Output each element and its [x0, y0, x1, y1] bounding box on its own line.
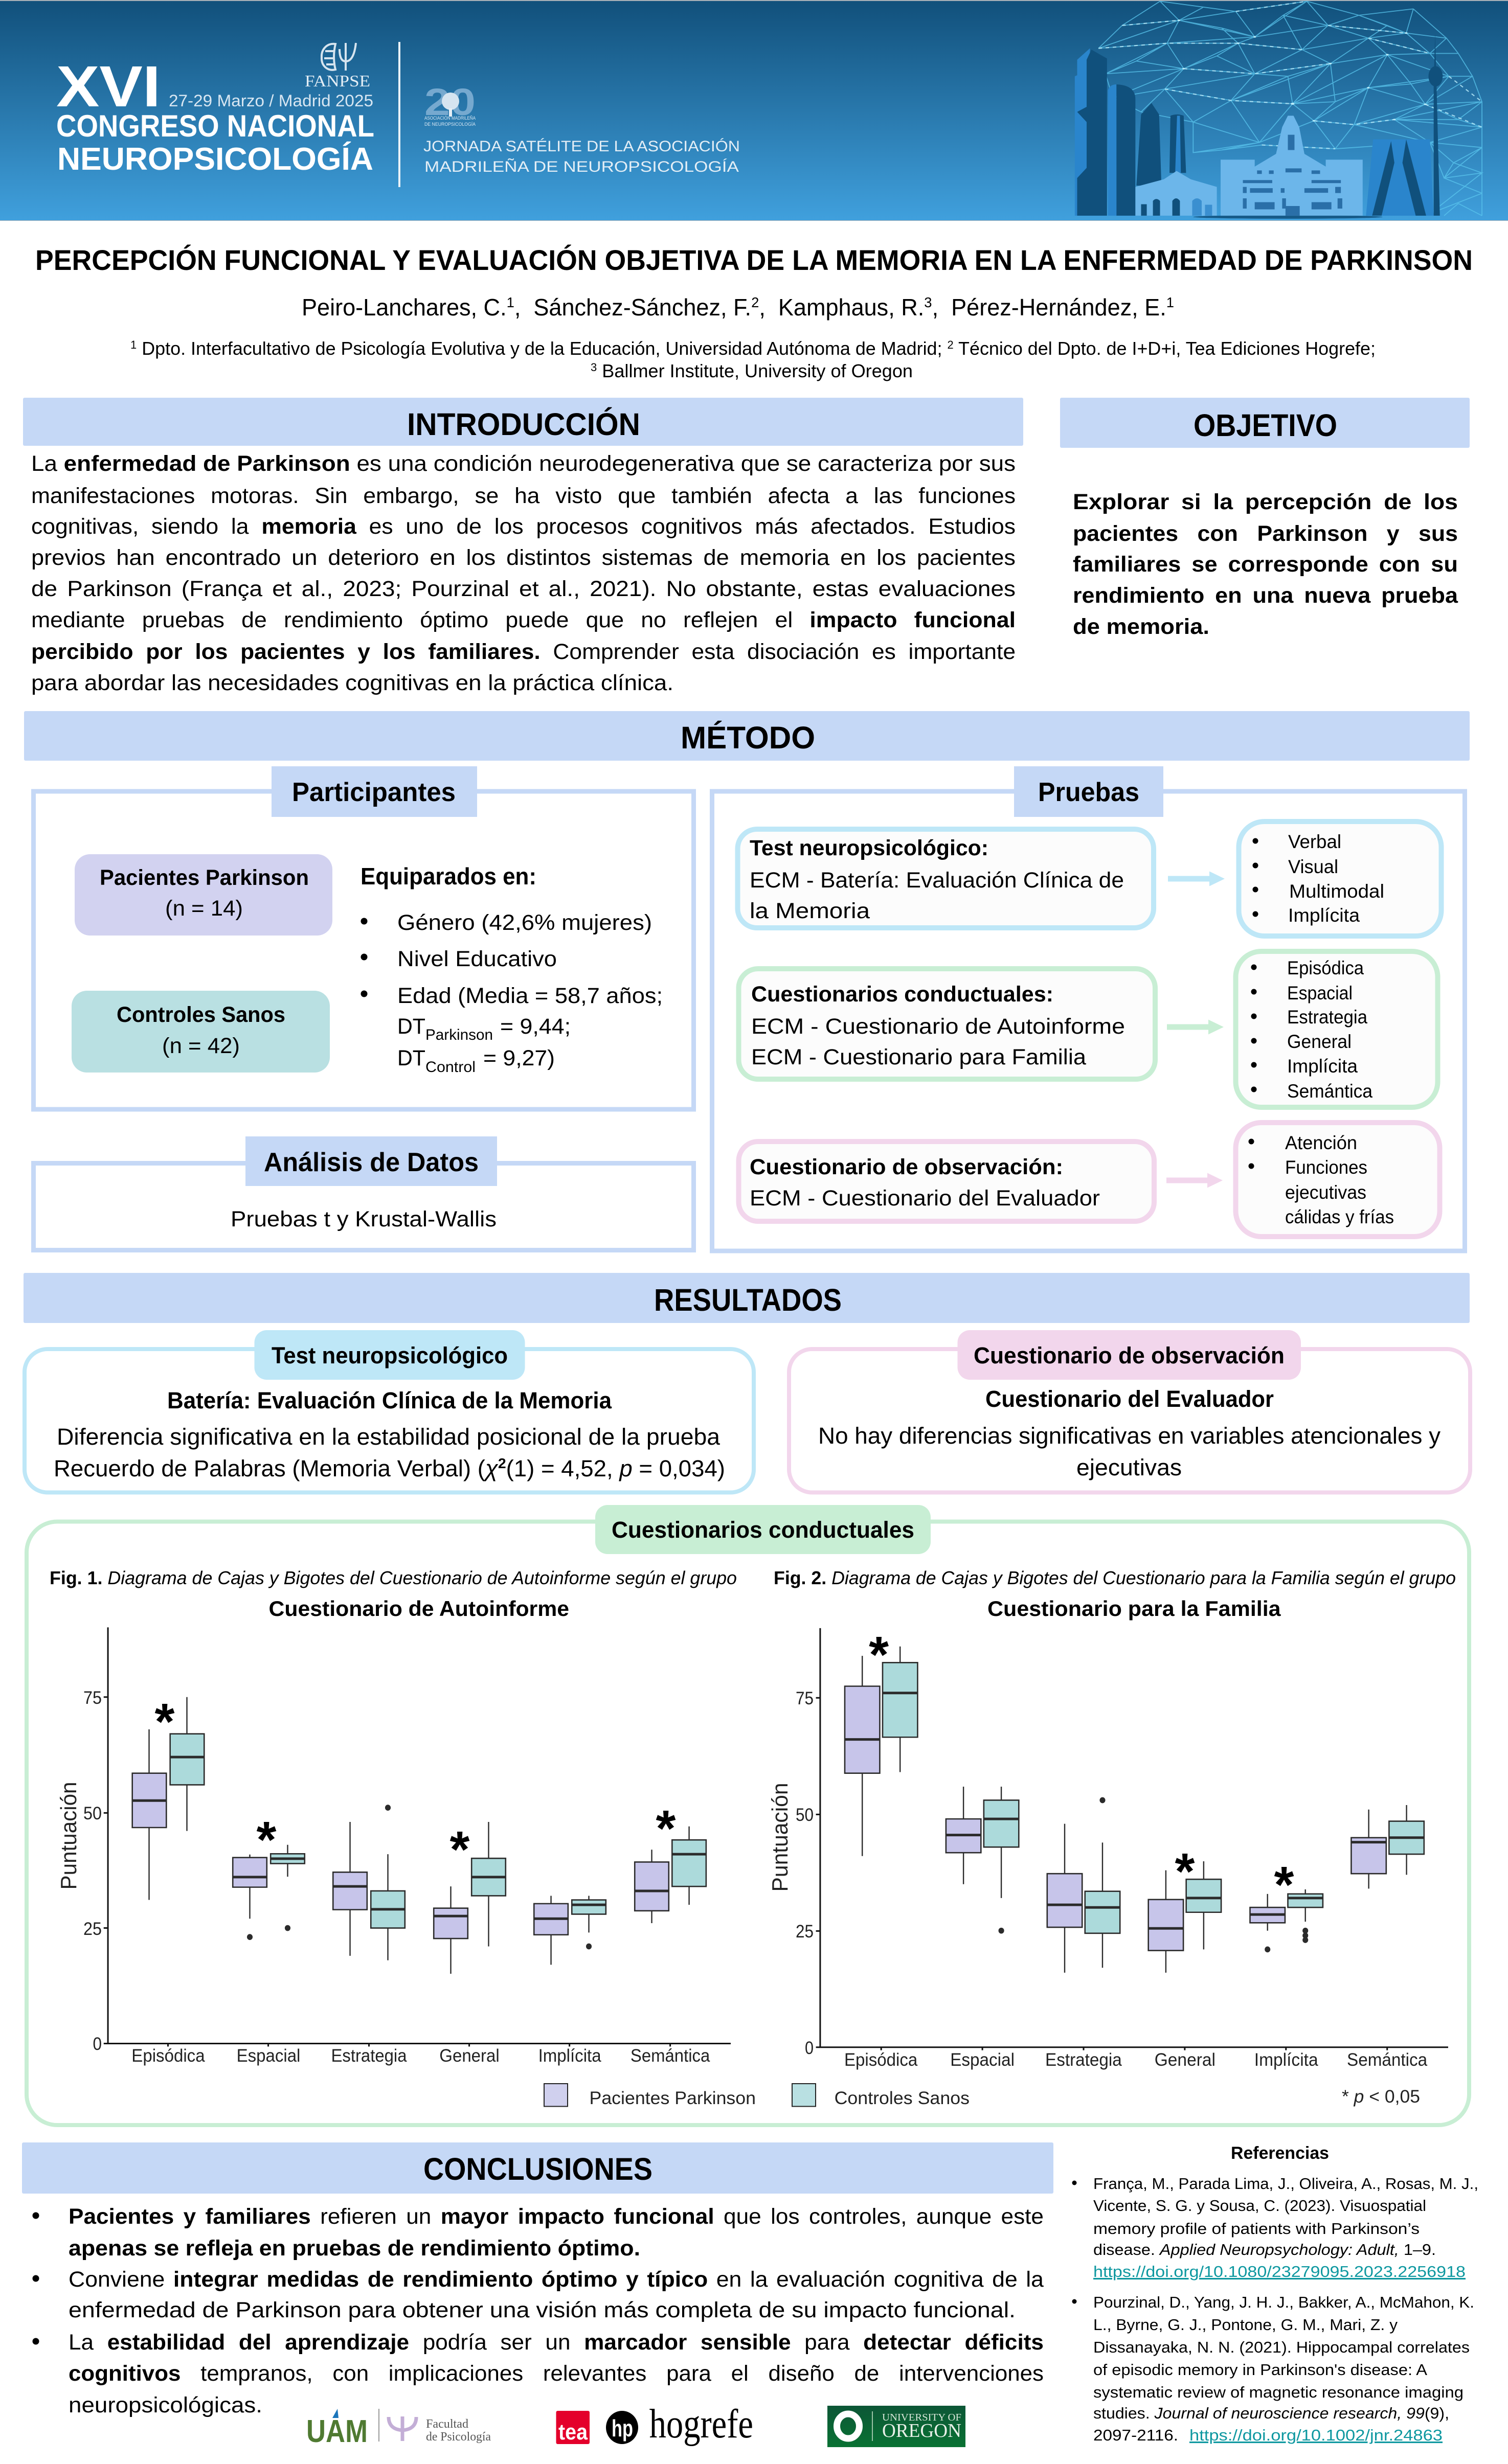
group: pacientes Parkinson: (n = 14) — [165, 896, 243, 921]
panel: conclusiones — [22, 2142, 1053, 2417]
list: dominios del test — [1239, 822, 1441, 936]
text: objetivo: pacientes con Parkinson y sus — [1073, 521, 1458, 546]
reference: Pourzinal et al. — [1072, 2293, 1474, 2444]
text: introducción: mediante pruebas de rendimiento óptimo puede que no reflejen el impacto funcional — [31, 608, 1016, 632]
list: conclusiones: Pacientes y familiares refieren un mayor impacto funcional que los controles, aunque este — [69, 2204, 1044, 2229]
y axis labels: Puntuación — [768, 1783, 793, 1891]
text: introducción: de Parkinson (França et al., 2023; Pourzinal et al., 2021). No obstante, estas evaluaciones — [31, 577, 1016, 601]
text: introducción — [31, 451, 1016, 695]
heading: resultados: RESULTADOS — [654, 1283, 842, 1317]
significance stars: * — [656, 1800, 676, 1857]
x axis labels: Semántica — [1347, 2050, 1428, 2070]
logo: University of Oregon: UNIVERSITY OF — [882, 2412, 961, 2423]
box: cuestionarios conductuales: ECM - Cuestionario de Autoinforme — [751, 1014, 1125, 1039]
y axis labels: 75 — [83, 1688, 102, 1708]
list: dominios de observación: cálidas y frías — [1285, 1206, 1394, 1227]
box: cuestionarios conductuales: Cuestionarios conductuales: — [751, 982, 1053, 1007]
box: test neuropsicológico — [737, 829, 1154, 928]
box: semántica — [635, 1827, 706, 1923]
list: equiparados en: Nivel Educativo — [397, 947, 557, 971]
y axis labels: 25 — [796, 1922, 814, 1942]
reference: França et al. — [1072, 2175, 1478, 2280]
heading: objetivo: OBJETIVO — [1194, 408, 1337, 443]
skyline of Madrid with network — [1075, 1, 1482, 219]
list: equiparados en — [361, 863, 663, 1076]
reference: Pourzinal et al.: 2097-2116. — [1093, 2426, 1178, 2444]
congress name — [56, 54, 374, 177]
x axis labels: Espacial — [950, 2050, 1015, 2070]
box: episódica — [132, 1697, 204, 1900]
reference: Pourzinal et al.: Pourzinal, D., Yang, J. H. J., Bakker, A., McMahon, K. — [1093, 2293, 1474, 2311]
list: equiparados en: DT — [397, 1046, 425, 1070]
list: dominios del test: Verbal — [1288, 831, 1341, 852]
affiliations: Técnico del Dpto. de I+D+i, Tea Ediciones Hogrefe; — [954, 338, 1376, 359]
logo: FANPSE — [305, 43, 370, 90]
list: equiparados en: Equiparados en: — [361, 863, 536, 889]
jornada text — [423, 138, 740, 175]
y axis labels: 75 — [796, 1689, 814, 1708]
note: significance: * p < 0,05 — [1342, 2087, 1420, 2107]
label: cuestionario de observación — [957, 1330, 1301, 1380]
x axis labels: Espacial — [237, 2046, 300, 2066]
list: dominios de observación: ejecutivas — [1285, 1182, 1366, 1203]
legend: pacientes Parkinson — [544, 2084, 756, 2108]
list: conclusiones: La estabilidad del aprendizaje podría ser un marcador sensible para detectar déficits — [69, 2330, 1044, 2355]
box: estrategia — [333, 1805, 405, 1960]
list: dominios conductuales: Episódica — [1287, 957, 1364, 978]
panel: análisis de datos — [34, 1136, 693, 1250]
significance stars: * — [155, 1693, 175, 1750]
panel: participantes — [34, 766, 693, 1109]
list: equiparados en: Control — [425, 1059, 476, 1076]
text: introducción: percibido por los pacientes y los familiares. Comprender esta disociación es importante — [31, 640, 1016, 664]
text: cuestionario del evaluador: Cuestionario del Evaluador — [985, 1386, 1274, 1412]
heading: pruebas: Pruebas — [1038, 778, 1139, 807]
y axis labels: 50 — [83, 1804, 102, 1823]
y axis labels — [56, 1688, 102, 2054]
x axis labels: General — [1155, 2050, 1216, 2070]
y axis labels — [768, 1689, 814, 2058]
heading: referencias: Referencias — [1231, 2143, 1329, 2163]
logo: UAM facultad de psicología: de Psicología — [426, 2430, 491, 2444]
panel: resultado test neuropsicológico — [25, 1330, 754, 1493]
heading: participantes: Participantes — [292, 778, 456, 807]
label: test neuropsicológico — [255, 1330, 525, 1380]
list: equiparados en: DT — [397, 1014, 425, 1039]
box: espacial — [946, 1787, 1019, 1934]
x axis labels: Estrategia — [331, 2046, 407, 2066]
box: implícita — [534, 1896, 606, 1965]
jornada text: JORNADA SATÉLITE DE LA ASOCIACIÓN — [423, 138, 740, 155]
text: diferencia significativa: 2 — [498, 1455, 506, 1471]
logo: 20 aniversario: ASOCIACIÓN MADRILEÑA — [424, 116, 476, 121]
chart title: familia: Cuestionario para la Familia — [987, 1596, 1281, 1621]
reference: Pourzinal et al.: L., Byrne, G. J., Pontone, G. M., Mari, Z. y — [1093, 2316, 1398, 2334]
authors: , Sánchez-Sánchez, F. — [514, 294, 751, 321]
text: pruebas estadísticas: Pruebas t y Krustal-Wallis — [231, 1207, 497, 1231]
heading: método: MÉTODO — [681, 720, 815, 755]
reference: Pourzinal et al.: studies. Journal of neuroscience research, 99 (9), — [1093, 2404, 1449, 2422]
logo: hogrefe: hogrefe — [649, 2402, 753, 2447]
box: cuestionario de observación: ECM - Cuestionario del Evaluador — [750, 1186, 1100, 1211]
reference: Pourzinal et al.: of episodic memory in Parkinson's disease: A — [1093, 2361, 1427, 2379]
affiliations: 2 — [948, 338, 954, 351]
box: cuestionarios conductuales: ECM - Cuestionario para Familia — [751, 1045, 1086, 1069]
heading: objetivo — [1060, 398, 1470, 448]
list: equiparados en: Parkinson — [425, 1026, 493, 1043]
box: cuestionario de observación — [738, 1142, 1154, 1221]
heading: resultados — [24, 1273, 1470, 1323]
y axis labels: 0 — [93, 2034, 102, 2054]
logo: UAM facultad de psicología: UAM — [306, 2414, 368, 2449]
logo: hogrefe — [606, 2402, 753, 2447]
congress name: XVI — [56, 54, 161, 119]
congress name: NEUROPSICOLOGÍA — [57, 142, 373, 177]
label: test neuropsicológico: Test neuropsicológico — [272, 1342, 508, 1368]
x axis labels: Estrategia — [1045, 2050, 1122, 2070]
authors: Peiro-Lanchares, C. — [302, 294, 511, 321]
logo: tea — [556, 2411, 590, 2445]
y axis labels: 50 — [796, 1805, 814, 1825]
list: dominios de observación — [1235, 1123, 1440, 1237]
authors: 1 — [1166, 294, 1174, 310]
heading: análisis de datos — [245, 1136, 497, 1186]
x axis labels: Implícita — [1254, 2050, 1318, 2070]
caption: figura 1: Fig. 1. Diagrama de Cajas y Bigotes del Cuestionario de Autoinforme según el grupo — [50, 1567, 737, 1588]
affiliations: 1 — [130, 338, 137, 351]
text: sin diferencias — [818, 1423, 1441, 1480]
reference: Pourzinal et al.: https://doi.org/10.1002/jnr.24863 — [1189, 2426, 1443, 2444]
text: objetivo: de memoria. — [1073, 614, 1209, 639]
y axis labels: 25 — [83, 1919, 102, 1939]
reference: Pourzinal et al.: Dissanayaka, N. N. (2021). Hippocampal correlates — [1093, 2338, 1470, 2356]
jornada text: MADRILEÑA DE NEUROPSICOLOGÍA — [424, 158, 739, 175]
text: batería: Batería: Evaluación Clínica de la Memoria — [167, 1387, 612, 1413]
box: espacial — [233, 1845, 305, 1940]
panel: objetivo — [1060, 398, 1470, 639]
box: cuestionario de observación: Cuestionario de observación: — [750, 1155, 1063, 1179]
list: conclusiones: Conviene integrar medidas de rendimiento óptimo y típico en la evaluación cognitiva de la — [69, 2267, 1044, 2292]
heading: pruebas — [1014, 766, 1163, 817]
authors: 3 — [924, 294, 932, 310]
logo: FANPSE: FANPSE — [305, 72, 370, 90]
text: diferencia significativa: Diferencia significativa en la estabilidad posicional de la prueba — [57, 1424, 721, 1450]
logo: tea: tea — [558, 2420, 588, 2445]
list: equiparados en: Género (42,6% mujeres) — [397, 910, 652, 935]
text: introducción: manifestaciones motoras. Sin embargo, se ha visto que también afecta a las funciones — [31, 484, 1016, 508]
list: conclusiones: neuropsicológicas. — [69, 2393, 262, 2417]
text: introducción: para abordar las necesidades cognitivas en la práctica clínica. — [31, 671, 673, 695]
significance stars — [869, 1626, 1294, 1913]
affiliations: Dpto. Interfacultativo de Psicología Evolutiva y de la Educación, Universidad Autónoma de Madrid; — [137, 338, 948, 359]
affiliations: Ballmer Institute, University of Oregon — [597, 360, 913, 381]
box: test neuropsicológico: ECM - Batería: Evaluación Clínica de — [750, 868, 1124, 893]
reference: França et al.: https://doi.org/10.1080/23279095.2023.2256918 — [1093, 2263, 1466, 2280]
significance stars: * — [1175, 1843, 1195, 1900]
panel: resultado cuestionario de observación — [789, 1330, 1470, 1493]
heading: introducción: INTRODUCCIÓN — [407, 407, 640, 442]
label: cuestionarios conductuales: Cuestionarios conductuales — [612, 1517, 914, 1543]
reference: França et al.: memory profile of patients with Parkinson’s — [1093, 2220, 1420, 2238]
text: objetivo — [1073, 490, 1458, 639]
legend: controles sanos — [792, 2084, 970, 2108]
logo: 20 aniversario: DE NEUROPSICOLOGÍA — [424, 122, 476, 127]
group: pacientes Parkinson — [75, 854, 332, 936]
box: episódica — [845, 1647, 917, 1856]
text: diferencia significativa: p = 0,034) — [619, 1455, 724, 1481]
list: dominios del test: Multimodal — [1289, 881, 1384, 902]
box: test neuropsicológico: Test neuropsicológico: — [750, 836, 988, 860]
list: dominios conductuales: Espacial — [1287, 983, 1353, 1003]
group: controles sanos: Controles Sanos — [117, 1002, 285, 1027]
heading: conclusiones: CONCLUSIONES — [423, 2152, 652, 2186]
group: controles sanos: (n = 42) — [162, 1034, 240, 1058]
text: objetivo: Explorar si la percepción de los — [1073, 490, 1458, 514]
title: PERCEPCIÓN FUNCIONAL Y EVALUACIÓN OBJETIVA DE LA MEMORIA EN LA ENFERMEDAD DE PARKINSON — [35, 244, 1473, 276]
box: semántica — [1351, 1805, 1424, 1889]
logo: University of Oregon — [827, 2406, 965, 2447]
reference: Pourzinal et al.: systematic review of magnetic resonance imaging — [1093, 2383, 1464, 2401]
list: dominios conductuales: Estrategia — [1287, 1007, 1367, 1028]
x axis labels: General — [439, 2046, 500, 2066]
box: implícita — [1250, 1889, 1323, 1952]
legend: pacientes Parkinson: Pacientes Parkinson — [589, 2088, 756, 2108]
list: conclusiones — [33, 2204, 1044, 2417]
legend: controles sanos: Controles Sanos — [835, 2088, 970, 2108]
panel: introducción — [23, 398, 1023, 695]
list: equiparados en: Edad (Media = 58,7 años; — [397, 984, 663, 1008]
significance stars: * — [869, 1626, 889, 1683]
caption: figura 2: Fig. 2. Diagrama de Cajas y Bigotes del Cuestionario para la Familia según el grupo — [774, 1567, 1456, 1588]
list: equiparados en: = 9,44; — [500, 1014, 571, 1039]
y axis labels: Puntuación — [56, 1782, 81, 1889]
box: general — [1149, 1861, 1221, 1973]
significance stars: * — [450, 1821, 470, 1878]
heading: participantes — [272, 766, 477, 817]
logo: UAM facultad de psicología: Facultad — [426, 2417, 468, 2431]
reference: França et al.: Vicente, S. G. y Sousa, C. (2023). Visuospatial — [1093, 2197, 1426, 2215]
text: objetivo: familiares se corresponde con su — [1073, 552, 1458, 577]
chart: familia boxplot — [768, 1626, 1448, 2070]
list: dominios conductuales: General — [1287, 1031, 1352, 1052]
x axis labels — [844, 2050, 1428, 2070]
heading: método — [24, 711, 1470, 761]
text: introducción: cognitivas, siendo la memoria es uno de los procesos cognitivos más afectados. Estudios — [31, 514, 1016, 539]
text: diferencia significativa: (1) = 4,52, — [506, 1455, 619, 1481]
list: dominios conductuales: Semántica — [1287, 1081, 1372, 1102]
text: sin diferencias: No hay diferencias significativas en variables atencionales y — [818, 1423, 1441, 1449]
significance stars: * — [1274, 1856, 1294, 1913]
panel: pruebas — [712, 766, 1465, 1251]
list: dominios del test: Implícita — [1288, 905, 1360, 926]
box: estrategia — [1047, 1797, 1120, 1973]
y axis labels: 0 — [805, 2038, 814, 2058]
box: test neuropsicológico: la Memoria — [750, 899, 870, 923]
list: dominios del test: Visual — [1288, 856, 1338, 877]
chart title: autoinforme: Cuestionario de Autoinforme — [269, 1596, 569, 1621]
label: cuestionarios conductuales — [595, 1505, 931, 1554]
group: pacientes Parkinson: Pacientes Parkinson — [100, 865, 309, 890]
text: objetivo: rendimiento en una nueva prueba — [1073, 583, 1458, 608]
list: equiparados en: = 9,27) — [483, 1046, 555, 1070]
reference: França et al.: França, M., Parada Lima, J., Oliveira, A., Rosas, M. J., — [1093, 2175, 1478, 2193]
heading: introducción — [23, 398, 1023, 446]
significance stars — [155, 1693, 676, 1878]
logo: University of Oregon: OREGON — [882, 2420, 961, 2442]
authors: 1 — [507, 294, 514, 310]
panel: cuestionarios conductuales — [27, 1505, 1469, 2125]
group: controles sanos — [72, 991, 330, 1073]
panel: referencias — [1072, 2143, 1478, 2444]
text: diferencia significativa — [54, 1424, 725, 1481]
x axis labels — [131, 2046, 710, 2066]
x axis labels: Episódica — [131, 2046, 205, 2066]
reference: França et al.: disease. Applied Neuropsychology: Adult, 1–9. — [1093, 2241, 1436, 2258]
x axis labels: Implícita — [538, 2046, 601, 2066]
chart: autoinforme boxplot — [56, 1627, 731, 2066]
text: diferencia significativa: Recuerdo de Palabras (Memoria Verbal) (χ — [54, 1455, 498, 1481]
text: sin diferencias: ejecutivas — [1076, 1454, 1182, 1480]
logo: 20 aniversario: 20 — [424, 81, 476, 123]
affiliations: 3 — [591, 361, 597, 374]
logo: hogrefe: hp — [612, 2415, 633, 2442]
arrow: cuestionarios conductuales — [1167, 1019, 1224, 1035]
heading: análisis de datos: Análisis de Datos — [264, 1148, 479, 1177]
list: dominios de observación: Funciones — [1285, 1157, 1367, 1178]
box: general — [434, 1822, 506, 1974]
x axis labels: Episódica — [844, 2050, 918, 2070]
header banner — [0, 0, 1508, 221]
significance stars: * — [257, 1811, 277, 1868]
list: conclusiones: apenas se refleja en pruebas de rendimiento óptimo. — [69, 2236, 640, 2261]
text: introducción: La enfermedad de Parkinson es una condición neurodegenerativa que se caracteriza por sus — [31, 451, 1016, 476]
congress name: CONGRESO NACIONAL — [56, 109, 374, 143]
list: dominios conductuales: Implícita — [1287, 1056, 1358, 1077]
logo: UAM facultad de psicología — [306, 2409, 491, 2449]
axes — [816, 1628, 1448, 2050]
heading: conclusiones — [22, 2142, 1053, 2194]
list: dominios de observación: Atención — [1285, 1132, 1357, 1153]
authors: , Pérez-Hernández, E. — [932, 294, 1166, 321]
box: cuestionarios conductuales — [738, 969, 1155, 1079]
list: conclusiones: enfermedad de Parkinson para obtener una visión más completa de su impacto funcional. — [69, 2298, 1016, 2322]
list: conclusiones: cognitivos tempranos, con implicaciones relevantes para el diseño de intervenciones — [69, 2361, 1044, 2386]
arrow: test neuropsicológico — [1168, 871, 1225, 886]
axes — [104, 1627, 731, 2046]
label: cuestionario de observación: Cuestionario de observación — [974, 1342, 1285, 1368]
authors: , Kamphaus, R. — [759, 294, 924, 321]
text: introducción: previos han encontrado un deterioro en los distintos sistemas de memoria en los pacientes — [31, 545, 1016, 570]
congress name: 27-29 Marzo / Madrid 2025 — [169, 92, 373, 110]
x axis labels: Semántica — [631, 2046, 710, 2066]
arrow: cuestionario de observación — [1166, 1173, 1223, 1188]
authors: 2 — [751, 294, 759, 310]
list: dominios conductuales — [1235, 951, 1438, 1107]
affiliations — [130, 338, 1376, 381]
